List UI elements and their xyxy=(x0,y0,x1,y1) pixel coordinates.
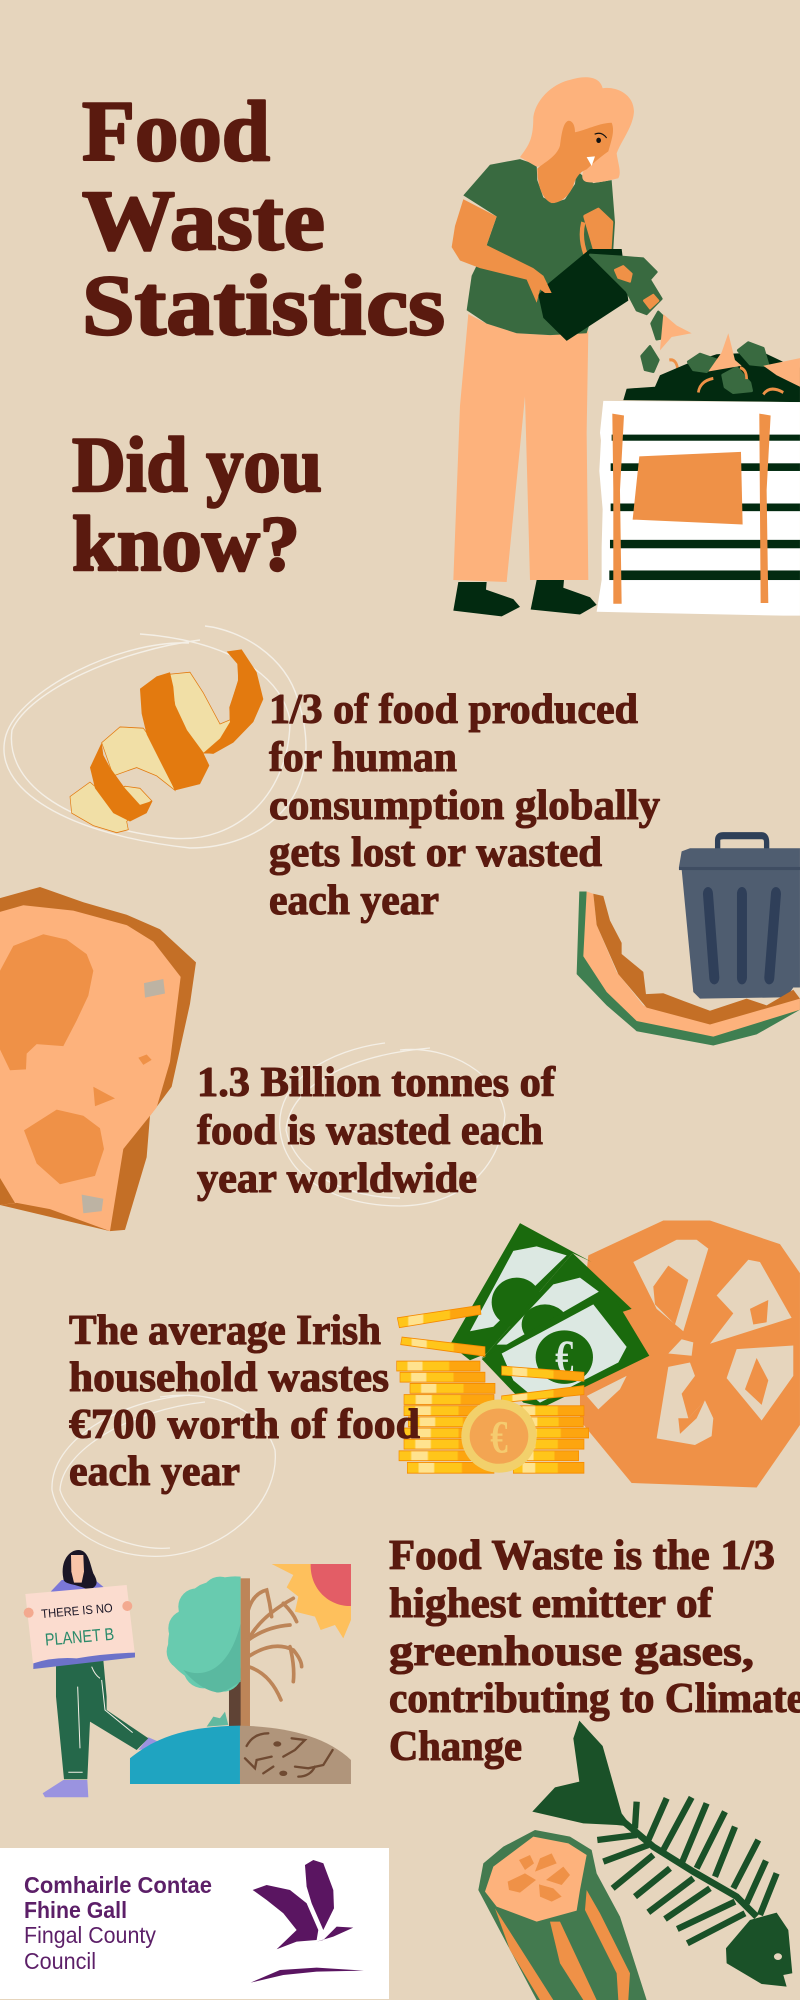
logo wordmark xyxy=(24,1872,212,1974)
icon: bird logo xyxy=(251,1860,364,1983)
text block: 1.3 billion tonnes: 1.3 Billion tonnes of xyxy=(197,1060,556,1106)
text block: one third of food wasted: each year xyxy=(269,878,439,924)
text block: Irish household waste xyxy=(69,1308,420,1495)
illustration: person pouring food scraps into compost bin xyxy=(452,77,800,616)
text block: one third of food wasted: for human xyxy=(269,735,457,781)
logo panel: Fingal County Council xyxy=(0,1848,389,1999)
text block: 1.3 billion tonnes: food is wasted each xyxy=(197,1108,543,1154)
icon: orange peel xyxy=(70,649,263,833)
text block: 1.3 billion tonnes xyxy=(197,1060,556,1202)
subheading: did you know: Did you xyxy=(72,421,322,508)
text block: greenhouse gases: greenhouse gases, xyxy=(389,1629,754,1675)
illustration: protester with There is no Planet B sign: PLANET B xyxy=(44,1624,115,1650)
text block: greenhouse gases: contributing to Climate xyxy=(389,1676,800,1722)
illustration: protester with There is no Planet B sign: THERE IS NO xyxy=(41,1601,113,1621)
logo wordmark: Comhairle Contae xyxy=(24,1872,212,1898)
text block: greenhouse gases xyxy=(389,1533,800,1770)
text block: one third of food wasted: gets lost or wasted xyxy=(269,830,602,876)
title xyxy=(82,83,445,353)
title: Waste xyxy=(82,172,325,268)
icon: rubbish bin and melon rind xyxy=(577,836,800,1046)
logo wordmark: Fhine Gall xyxy=(24,1897,127,1923)
subheading: did you know xyxy=(72,421,322,587)
title: Food xyxy=(82,83,270,179)
icon: coin stacks xyxy=(397,1305,589,1473)
text block: one third of food wasted xyxy=(269,687,660,924)
scribble ring: second fact xyxy=(280,1043,505,1206)
text block: Irish household waste: The average Irish xyxy=(69,1308,381,1354)
illustration: protester with There is no Planet B sign xyxy=(24,1550,158,1797)
text block: Irish household waste: household wastes xyxy=(69,1355,389,1401)
subheading: did you know: know? xyxy=(72,500,300,587)
text block: greenhouse gases: Change xyxy=(389,1724,522,1770)
icon: euro banknotes xyxy=(450,1223,649,1407)
icon: coin stacks: € xyxy=(490,1411,508,1463)
text block: one third of food wasted: consumption globally xyxy=(269,783,660,829)
title: Statistics xyxy=(82,257,445,353)
scribble ring: first fact xyxy=(4,626,306,848)
text block: one third of food wasted: 1/3 of food produced xyxy=(269,687,638,733)
text block: Irish household waste: €700 worth of food xyxy=(69,1402,420,1448)
icon: fish skeleton xyxy=(532,1721,792,1987)
icon: cut cucumber xyxy=(478,1830,647,2000)
scribble ring: third fact xyxy=(52,1395,275,1556)
logo wordmark: Fingal County xyxy=(24,1922,156,1948)
text block: greenhouse gases: Food Waste is the 1/3 xyxy=(389,1533,775,1579)
text block: 1.3 billion tonnes: year worldwide xyxy=(197,1156,477,1202)
icon: orange slice xyxy=(580,1221,800,1487)
text block: Irish household waste: each year xyxy=(69,1449,240,1495)
logo wordmark: Council xyxy=(24,1948,96,1974)
illustration: climate tree split into healthy and dry halves xyxy=(130,1564,351,1784)
icon: potato slice xyxy=(0,887,196,1231)
icon: euro banknotes: € xyxy=(555,1331,574,1385)
text block: greenhouse gases: highest emitter of xyxy=(389,1581,713,1627)
